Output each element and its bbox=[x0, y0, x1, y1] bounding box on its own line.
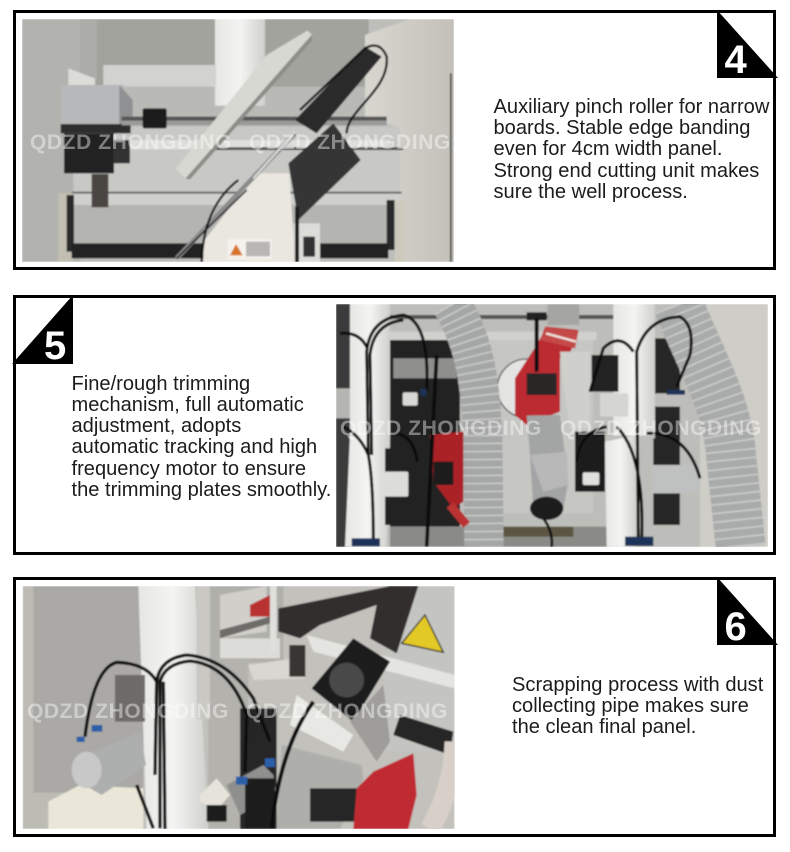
frame 6 bbox=[14, 578, 774, 836]
text: step 5 description: frequency motor to ensure bbox=[72, 458, 306, 480]
text: step 5 description: adjustment, adopts bbox=[72, 415, 241, 437]
photo: scraping unit bbox=[23, 586, 455, 829]
badge: number 5 bbox=[12, 295, 73, 368]
watermark bbox=[30, 134, 449, 154]
cables bbox=[340, 315, 700, 547]
badge: number 6 bbox=[717, 577, 778, 649]
photo: pinch roller unit bbox=[22, 19, 454, 262]
text: step 6 description: collecting pipe makes sure bbox=[512, 695, 749, 717]
text: step 4 description: boards. Stable edge banding bbox=[494, 117, 750, 139]
watermark bbox=[28, 704, 446, 722]
cylinders bbox=[600, 393, 628, 417]
watermark: QDZD ZHONGDING bbox=[340, 417, 542, 440]
panel: step 5 bbox=[12, 295, 774, 554]
photo: trimming mechanism bbox=[336, 304, 768, 547]
text: step 5 description: Fine/rough trimming bbox=[72, 373, 250, 395]
hoses bbox=[452, 304, 741, 547]
watermark bbox=[340, 420, 760, 440]
frame 4 bbox=[14, 12, 774, 268]
badge: number 4: 4 bbox=[724, 38, 748, 82]
text: step 4 description: sure the well process. bbox=[494, 181, 688, 203]
watermark: QDZD ZHONGDING bbox=[30, 131, 232, 154]
text: step 6 description: the clean final panel. bbox=[512, 716, 696, 738]
frame 5 bbox=[14, 296, 774, 554]
watermark: QDZD ZHONGDING bbox=[249, 131, 451, 154]
badge: number 4 bbox=[717, 10, 778, 82]
text: step 4 description: Auxiliary pinch roller for narrow bbox=[494, 96, 770, 118]
badge: number 6: 6 bbox=[724, 605, 747, 649]
text: step 5 description: automatic tracking and high bbox=[72, 436, 317, 458]
text: step 5 description: the trimming plates smoothly. bbox=[72, 479, 331, 501]
watermark: QDZD ZHONGDING bbox=[246, 700, 448, 723]
watermark: QDZD ZHONGDING bbox=[27, 700, 229, 723]
panel: step 6 bbox=[14, 577, 778, 836]
text: step 5 description: mechanism, full automatic bbox=[72, 394, 304, 416]
watermark: QDZD ZHONGDING bbox=[560, 417, 762, 440]
panel: step 4 bbox=[14, 10, 778, 268]
text: step 4 description: Strong end cutting unit makes bbox=[494, 160, 759, 182]
text: step 4 description: even for 4cm width panel. bbox=[494, 138, 722, 160]
text: step 6 description: Scrapping process with dust bbox=[512, 674, 764, 696]
badge: number 5: 5 bbox=[44, 324, 66, 368]
